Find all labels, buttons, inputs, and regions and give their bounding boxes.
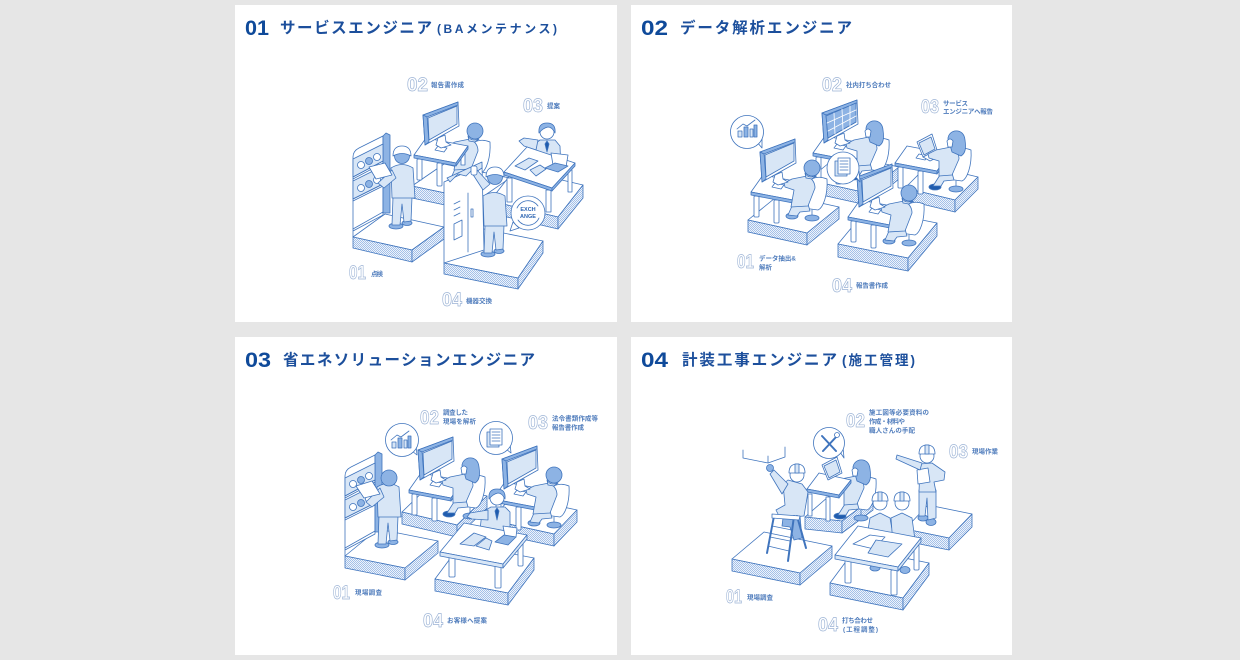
label 04 bbox=[832, 276, 888, 297]
platform: proposal bbox=[435, 544, 534, 605]
label 02: 施工図等必要資料の bbox=[869, 408, 930, 416]
label 01: 01 bbox=[726, 587, 742, 608]
label 01: 点検 bbox=[371, 269, 384, 278]
label 03: 03 bbox=[921, 97, 939, 118]
label 03 bbox=[949, 442, 998, 463]
label 04: 04 bbox=[442, 290, 462, 311]
platform: meeting bbox=[808, 154, 899, 205]
heading: 01 bbox=[245, 17, 557, 40]
label 04 bbox=[423, 611, 488, 632]
label 02: 作成・材料や bbox=[869, 416, 906, 426]
heading: 04 bbox=[641, 349, 915, 372]
replacing worker bbox=[471, 166, 507, 257]
platform: report bbox=[838, 209, 937, 271]
worker analysis bbox=[409, 437, 485, 521]
label 01: 現場調査 bbox=[747, 592, 774, 602]
illustration: energy solutions bbox=[345, 422, 577, 605]
shelf bbox=[345, 452, 382, 556]
label 02 bbox=[822, 75, 892, 96]
worker report bbox=[848, 164, 924, 248]
bubble: documents bbox=[480, 422, 512, 454]
heading: 01: (BAメンテナンス) bbox=[437, 22, 557, 36]
label 02: 社内打ち合わせ bbox=[846, 80, 892, 89]
cabinet bbox=[444, 162, 484, 263]
platform: planning bbox=[805, 490, 873, 533]
ladder worker bbox=[766, 464, 808, 561]
consultant man bbox=[519, 123, 561, 172]
label 01: データ抽出& bbox=[759, 254, 796, 262]
label 03: 提案 bbox=[547, 101, 560, 110]
bubble: chart bbox=[386, 424, 418, 456]
label 03: 03 bbox=[523, 96, 543, 117]
bubble: document bbox=[827, 152, 860, 184]
platform: rear desk bbox=[412, 164, 510, 212]
bubble: exchange: EXCH bbox=[520, 207, 536, 213]
label 02: 現場を解析 bbox=[443, 416, 476, 426]
heading: 02 bbox=[641, 17, 852, 40]
platform: exchange bbox=[444, 226, 543, 289]
heading: 03: 省エネソリューションエンジニア bbox=[283, 351, 535, 369]
heading: 01: サービスエンジニア bbox=[280, 18, 432, 37]
label 02: 02 bbox=[846, 411, 865, 432]
panel: 01 service engineer bbox=[235, 5, 617, 322]
worker with laptop bbox=[895, 131, 971, 194]
illustration: service engineer bbox=[353, 102, 583, 289]
label 03 bbox=[528, 413, 598, 434]
label 03: 法令書類作成等 bbox=[552, 414, 598, 422]
heading: 03: 03 bbox=[245, 349, 271, 372]
panel: 03 energy-saving engineer bbox=[235, 337, 617, 655]
survey worker bbox=[356, 470, 401, 548]
label 04: 04 bbox=[423, 611, 443, 632]
label 03: エンジニアへ報告 bbox=[943, 106, 994, 116]
heading: 04: (施工管理) bbox=[842, 352, 915, 368]
heading: 02: データ解析エンジニア bbox=[680, 18, 852, 37]
platform: meeting bbox=[830, 548, 929, 610]
platform: documents bbox=[490, 496, 577, 546]
label 01 bbox=[726, 587, 774, 608]
worker documents bbox=[493, 446, 569, 530]
label 02: 職人さんの手配 bbox=[869, 426, 916, 434]
platform: survey bbox=[732, 532, 832, 585]
platform: survey bbox=[345, 529, 438, 580]
label 03: サービス bbox=[943, 98, 968, 108]
heading: 04: 04 bbox=[641, 349, 668, 372]
label 03 bbox=[523, 96, 560, 117]
label 04: (工程調整) bbox=[843, 624, 878, 634]
label 02: 02 bbox=[822, 75, 842, 96]
label 02: 報告書作成 bbox=[431, 80, 464, 89]
label 02: 調査した bbox=[443, 408, 468, 416]
platform: proposal bbox=[490, 169, 583, 229]
ceiling corner bbox=[743, 447, 785, 463]
worker with laptop bbox=[807, 457, 876, 521]
inspecting worker bbox=[369, 146, 415, 229]
pointing supervisor bbox=[896, 445, 945, 526]
bubble: exchange bbox=[510, 196, 545, 231]
label 04: 機器交換 bbox=[466, 296, 492, 305]
platform: site work bbox=[905, 505, 972, 550]
label 03: 03 bbox=[528, 413, 548, 434]
label 01 bbox=[333, 583, 382, 604]
label 02 bbox=[420, 408, 476, 429]
table bbox=[440, 523, 527, 588]
label 04: 04 bbox=[818, 615, 838, 636]
illustration: instrumentation work bbox=[732, 428, 972, 610]
heading: 03 bbox=[245, 349, 535, 372]
label 03 bbox=[921, 97, 994, 118]
worker at monitor bbox=[414, 102, 490, 186]
label 04 bbox=[442, 290, 492, 311]
label 04 bbox=[818, 615, 878, 636]
platform: analysis bbox=[402, 483, 487, 537]
label 02: 02 bbox=[420, 408, 439, 429]
ladder bbox=[767, 514, 806, 561]
bubble: tools bbox=[814, 428, 844, 458]
label 01: 01 bbox=[349, 263, 366, 284]
illustration: data analysis bbox=[730, 100, 978, 271]
worker extraction bbox=[751, 139, 827, 223]
platform: inspection bbox=[353, 214, 444, 262]
shelf bbox=[353, 133, 390, 237]
label 04: お客様へ提案 bbox=[447, 616, 488, 624]
label 03: 03 bbox=[949, 442, 968, 463]
platform: reporting bbox=[905, 165, 978, 212]
label 02 bbox=[846, 408, 930, 434]
label 01: 解析 bbox=[759, 262, 772, 272]
heading: 04: 計装工事エンジニア bbox=[682, 350, 837, 369]
label 03: 報告書作成 bbox=[552, 422, 584, 432]
bubble: exchange: ANGE bbox=[520, 214, 536, 220]
label 03: 現場作業 bbox=[972, 446, 998, 456]
table with laptop bbox=[504, 147, 575, 212]
label 01: 01 bbox=[333, 583, 350, 604]
label 04: 04 bbox=[832, 276, 852, 297]
table with drawings bbox=[835, 526, 921, 595]
label 01: 01 bbox=[737, 252, 754, 273]
worker with video wall bbox=[813, 100, 889, 184]
label 02 bbox=[407, 75, 464, 96]
label 01: 現場調査 bbox=[355, 588, 382, 596]
panel: 02 data analysis engineer bbox=[631, 5, 1012, 322]
panel: 04 instrumentation engineer bbox=[631, 337, 1012, 655]
bubble: chart bbox=[730, 116, 764, 148]
heading: 02: 02 bbox=[641, 17, 668, 40]
heading: 01: 01 bbox=[245, 17, 269, 40]
platform: data extraction bbox=[748, 194, 839, 245]
video grid screen bbox=[826, 103, 856, 138]
label 01 bbox=[349, 263, 384, 284]
label 02: 02 bbox=[407, 75, 428, 96]
label 04: 打ち合わせ bbox=[842, 616, 874, 624]
consultant bbox=[467, 489, 510, 540]
two helmet workers bbox=[867, 492, 915, 574]
label 01 bbox=[737, 252, 796, 273]
label 04: 報告書作成 bbox=[856, 280, 888, 290]
